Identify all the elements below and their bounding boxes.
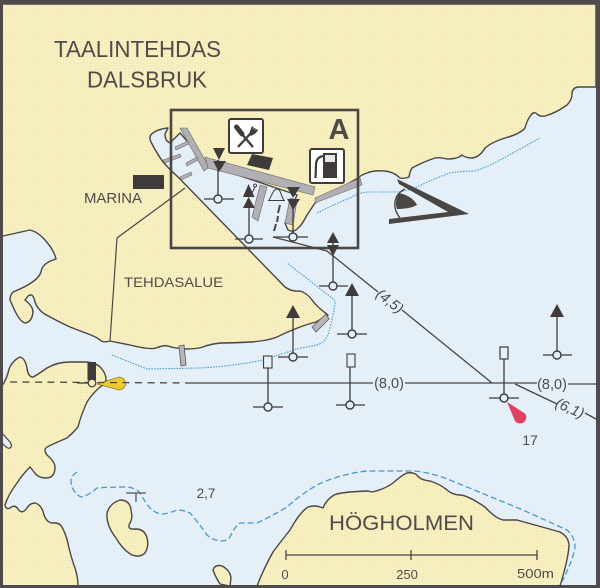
inset frame A bbox=[171, 110, 358, 248]
place name: Högholmen: HÖGHOLMEN bbox=[329, 512, 474, 535]
icon: restaurant bbox=[229, 119, 263, 153]
beacon: rectangle marker one bbox=[253, 356, 283, 411]
dotted fairway south of factory bbox=[112, 263, 335, 369]
beacon: rectangle marker three bbox=[489, 347, 519, 402]
dashed harbour lane bbox=[274, 205, 280, 231]
scale bar bbox=[281, 550, 554, 582]
pier at factory point bbox=[312, 314, 329, 332]
beacon: harbour pier down markers bbox=[273, 187, 308, 241]
scale bar: 250 bbox=[396, 567, 418, 582]
beacon: entrance up and down markers bbox=[319, 232, 348, 290]
route depth labels: (4,5) bbox=[373, 286, 406, 317]
harbour piers bbox=[163, 128, 362, 225]
building in harbour bbox=[247, 154, 273, 170]
place name: Taalintehdas Dalsbruk bbox=[54, 36, 221, 92]
marina area boundary line bbox=[110, 188, 185, 341]
route depth labels: (8,0) bbox=[537, 377, 567, 393]
depth contour dashed south bbox=[71, 471, 575, 582]
land: Högholmen island bbox=[257, 473, 569, 586]
water notch in headland bbox=[2, 433, 12, 448]
place name: Taalintehdas Dalsbruk: TAALINTEHDAS bbox=[54, 36, 221, 62]
route depth labels bbox=[373, 286, 586, 422]
small pier south shore bbox=[179, 345, 186, 366]
tiny islet bbox=[213, 566, 231, 586]
scale bar: 500m bbox=[517, 566, 554, 581]
beacon: triangle marker east of point bbox=[337, 283, 367, 338]
icon: small figure bbox=[252, 184, 257, 193]
marina building bbox=[133, 175, 164, 189]
route depth labels: (8,0) bbox=[374, 376, 404, 392]
yellow sector light bbox=[97, 377, 126, 390]
scale bar: 0 bbox=[281, 567, 289, 582]
beacon: inner harbour up markers bbox=[235, 184, 263, 243]
depth number 2,7: 2,7 bbox=[197, 486, 215, 501]
beacon: triangle marker on point bbox=[278, 305, 308, 361]
beacon: rectangle marker two bbox=[336, 354, 365, 409]
western beacon bbox=[77, 362, 96, 387]
number 17: 17 bbox=[522, 432, 538, 448]
icon: fuel pump bbox=[310, 149, 344, 183]
label: Marina: MARINA bbox=[84, 191, 142, 207]
route lines bbox=[10, 237, 596, 419]
red sector light bbox=[507, 402, 526, 423]
depth mark cross bbox=[126, 493, 146, 502]
beacon: triangle marker east bbox=[543, 304, 572, 359]
sector light symbol bbox=[389, 179, 469, 224]
dotted fairway north-east bbox=[317, 138, 540, 213]
small island bbox=[107, 500, 148, 556]
land: north mainland bbox=[2, 4, 596, 349]
icon: mooring dome bbox=[268, 189, 285, 200]
land: western headland bbox=[2, 357, 106, 586]
inset letter A: A bbox=[329, 114, 350, 146]
beacon: inner harbour down markers bbox=[204, 148, 234, 203]
route depth labels: (6,1) bbox=[553, 396, 586, 422]
label: Tehdasalue: TEHDASALUE bbox=[124, 274, 223, 290]
place name: Taalintehdas Dalsbruk: DALSBRUK bbox=[87, 66, 208, 92]
